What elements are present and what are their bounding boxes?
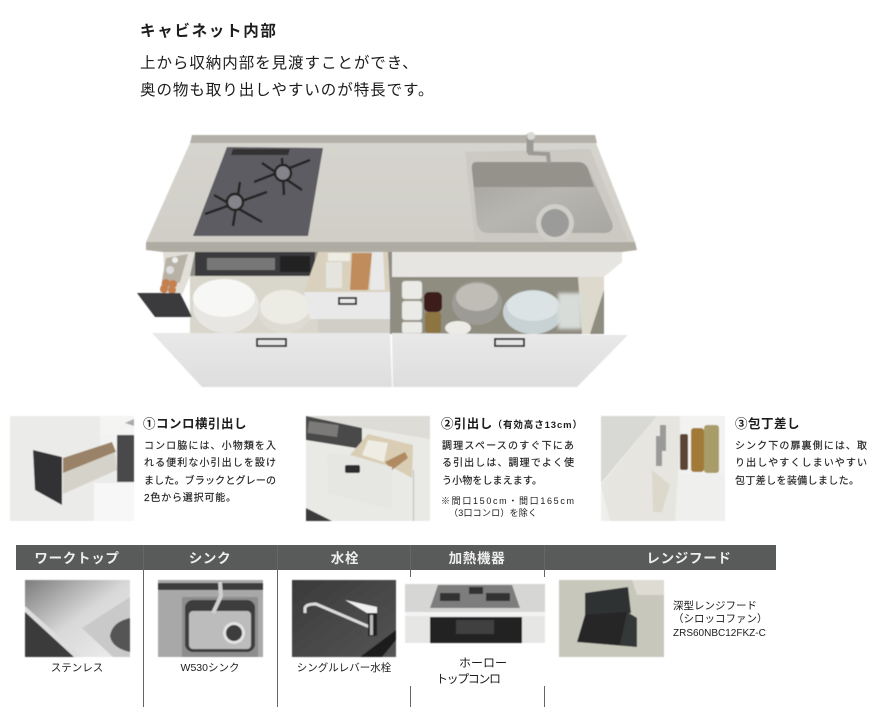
feature 2 text: る引出しは、調理でよく使 (442, 456, 574, 469)
worktop photo (25, 580, 130, 657)
range hood label: （シロッコファン） (673, 613, 768, 625)
intro text: 奥の物も取り出しやすいのが特長です。 (140, 81, 434, 99)
sink photo (158, 580, 263, 657)
feature 2 text: ※間口150cm・間口165cm (441, 496, 574, 506)
range hood label: ZRS60NBC12FKZ-C (673, 628, 766, 639)
sink (465, 149, 628, 242)
faucet label: シングルレバー水栓 (297, 661, 392, 674)
handle (339, 298, 356, 304)
burner left (205, 182, 267, 226)
photo 1: side drawer (10, 416, 134, 521)
feature 2 text: う小物をしまえます。 (442, 474, 542, 487)
feature 1 text (143, 416, 276, 504)
right cabinet interior (396, 277, 604, 335)
burner right (254, 158, 310, 195)
pot small (258, 289, 312, 333)
range hood photo (559, 580, 664, 657)
feature 2 text: （3口コンロ）を除く (449, 507, 537, 518)
feature 3 text: 包丁差しを装備しました。 (735, 474, 859, 487)
feature 2 text (441, 417, 583, 518)
worktop label: ステンレス (51, 662, 103, 674)
black drawer front (137, 293, 192, 317)
feature 3 text (735, 416, 867, 487)
countertop (146, 143, 635, 242)
storage containers (402, 281, 422, 333)
spec table header band: ワークトップ (34, 551, 120, 566)
cabinet body (190, 252, 604, 334)
faucet (527, 132, 549, 164)
small side drawer (137, 252, 195, 317)
feature 1 text: れる便利な小引出しを設け (144, 456, 276, 469)
spec table header band: 水栓 (331, 550, 359, 566)
hob label: ホーロー (459, 656, 507, 670)
feature 3 text: り出しやすくしまいやすい (735, 457, 867, 469)
lower drawer right (392, 333, 628, 387)
spec table header band: 加熱機器 (449, 550, 505, 566)
feature 1 text: ました。ブラックとグレーの (144, 474, 276, 487)
sink label: W530シンク (181, 662, 239, 674)
photo 2: drawer (306, 416, 430, 521)
backsplash (190, 135, 597, 143)
hob label (436, 656, 507, 686)
title: キャビネット内部 (140, 21, 278, 40)
hob label: トップコンロ (436, 672, 501, 686)
photo 3: knife holder (601, 416, 725, 521)
intro text: 上から収納内部を見渡すことができ、 (140, 54, 419, 72)
feature 1 text: 2色から選択可能。 (144, 491, 236, 504)
left cabinet interior (190, 276, 318, 336)
counter front edge (146, 242, 637, 252)
spec table header band (16, 545, 776, 570)
spec table header band: レンジフード (646, 551, 732, 566)
gas hob (193, 147, 323, 236)
right cabinet top panel (392, 252, 622, 277)
feature 3 text: ③包丁差し (735, 416, 800, 431)
faucet photo (292, 580, 396, 657)
feature 1 text: コンロ脇には、小物類を入 (144, 439, 276, 452)
drawer front (304, 292, 390, 319)
middle drawer (304, 252, 390, 319)
bottles (424, 292, 442, 333)
hob photo (405, 584, 545, 643)
bowls (503, 290, 563, 334)
spec table header band: シンク (189, 551, 231, 566)
oven (195, 252, 315, 276)
feature 2 text: ②引出し（有効高さ13cm） (441, 417, 583, 431)
colander (452, 281, 502, 325)
range hood label (673, 599, 768, 639)
feature 3 text: シンク下の扉裏側には、取 (735, 439, 867, 452)
feature 2 text: 調理スペースのすぐ下にあ (442, 440, 574, 452)
intro text (140, 54, 434, 99)
kitchen main photo (137, 132, 637, 387)
range hood label: 深型レンジフード (673, 599, 757, 612)
lower drawer left (152, 333, 392, 387)
feature 1 text: ①コンロ横引出し (143, 416, 247, 431)
pot large (193, 279, 259, 333)
